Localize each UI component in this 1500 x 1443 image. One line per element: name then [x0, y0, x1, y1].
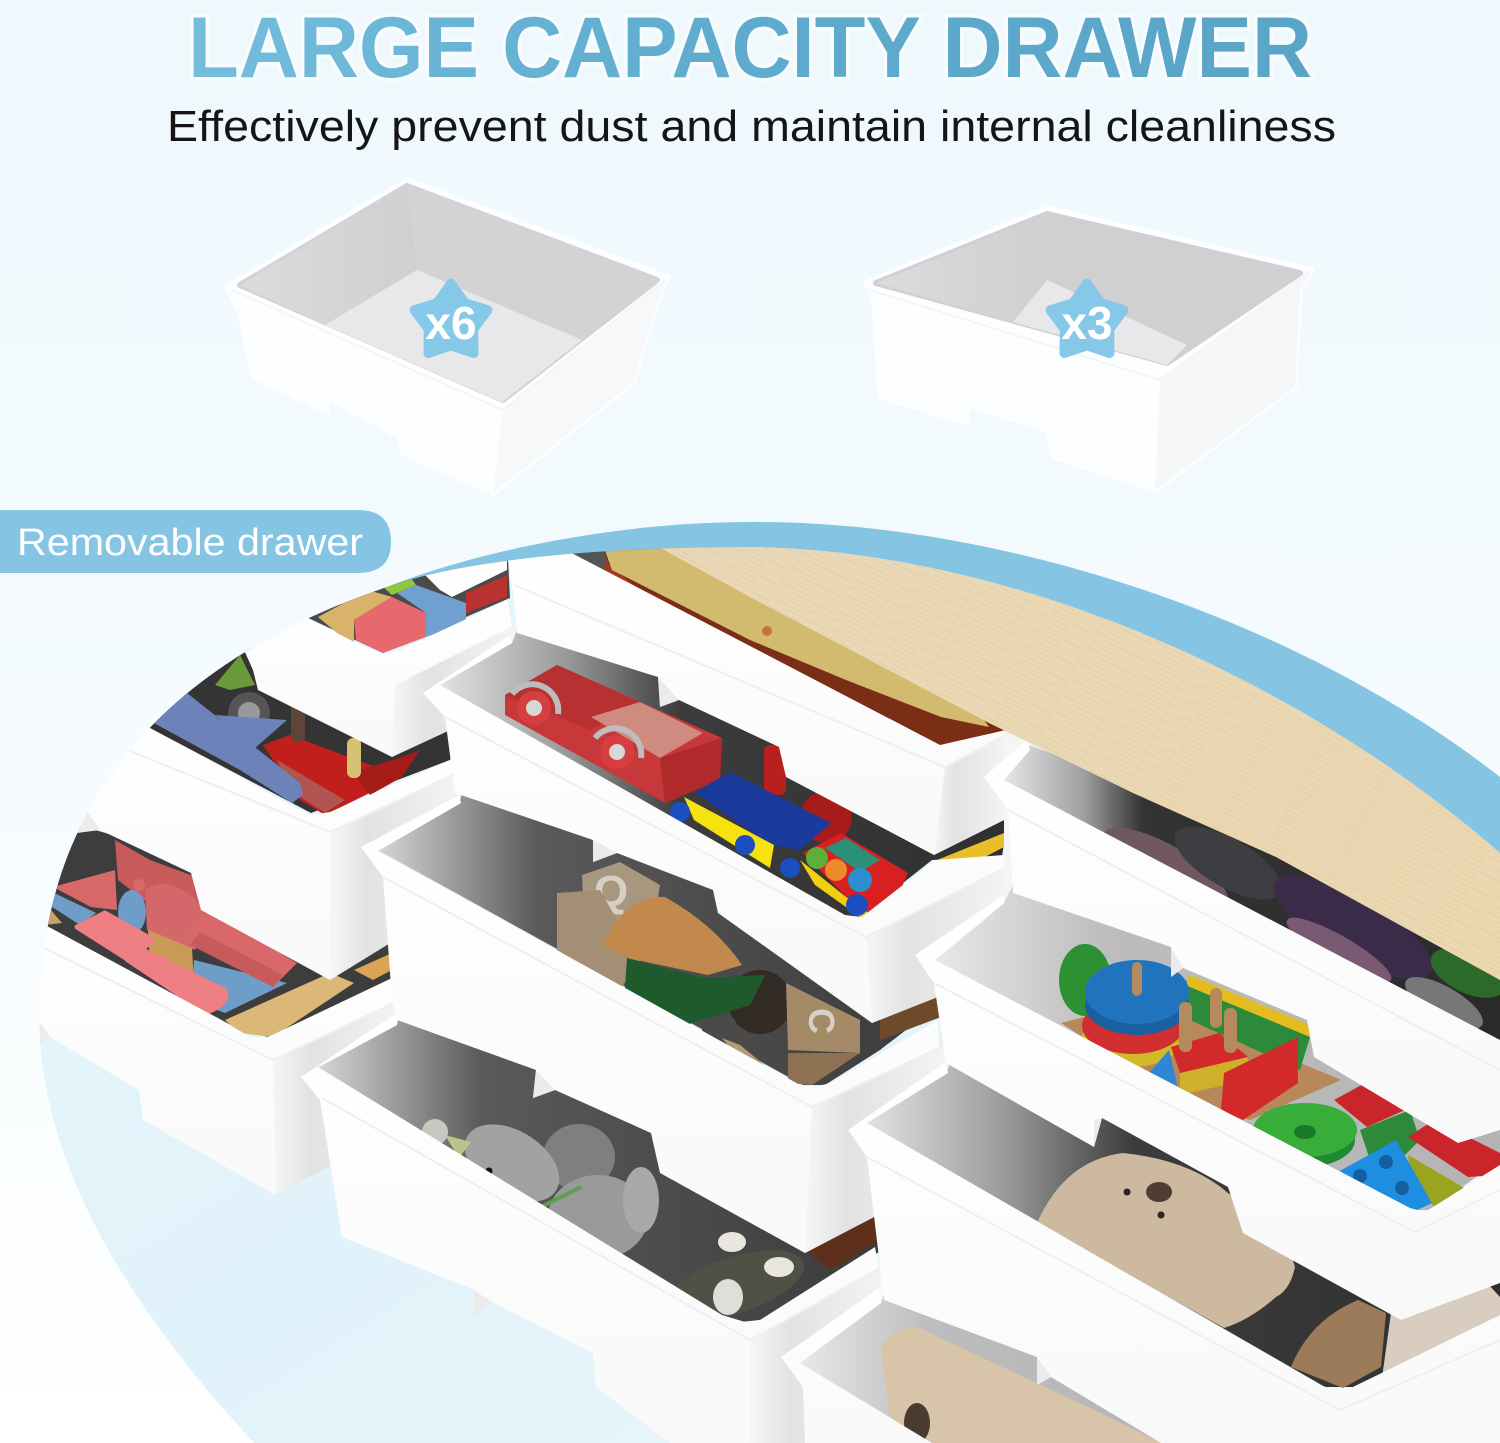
drawer: elephant plush [301, 990, 900, 1443]
badge: x3 [1050, 283, 1124, 353]
blue arc band [387, 522, 1500, 853]
badge: x6 [414, 283, 488, 353]
drawer: fire truck [423, 610, 1010, 1023]
subtitle: Effectively prevent dust and maintain internal cleanliness [167, 102, 1336, 151]
drawer: bear plush [848, 1040, 1500, 1443]
badge: x3: x3 [1061, 297, 1113, 349]
drawer: wood animal, bottom right [781, 1288, 1161, 1443]
pill label: removable drawer: Removable drawer [17, 522, 363, 564]
drawer product: six pack [227, 180, 668, 493]
drawer: wood letter blocks [361, 770, 945, 1253]
icon: toy cars [1104, 826, 1500, 1028]
wood tabletop [655, 545, 1500, 980]
pill label: removable drawer [0, 510, 391, 573]
drawer: shape stacker [915, 870, 1500, 1320]
drawer: toy cars [984, 740, 1500, 1143]
icon: rabbit toy [676, 1232, 804, 1316]
drawer: colored blocks, top left [244, 540, 515, 757]
icon: fire truck toy [505, 665, 722, 803]
icon: gear toy [780, 833, 908, 917]
side frame [1004, 725, 1032, 905]
icon: elephant toy [422, 1119, 659, 1254]
title: LARGE CAPACITY DRAWER [188, 0, 1312, 96]
badge: x6: x6 [425, 297, 477, 349]
icon: yellow blue bus toy [670, 772, 831, 868]
drawer: toy vehicle, middle left [60, 640, 470, 980]
drawer: wood letter blocks: Q [594, 867, 628, 916]
drawer: wooden blocks, lower left [20, 820, 400, 1195]
drawer: top tray with play board [507, 530, 1006, 855]
drawer: wood letter blocks: C [801, 1008, 842, 1034]
drawer unit close-up [20, 530, 1500, 1443]
drawer product: three pack [865, 208, 1312, 490]
icon: bear toy [1037, 1153, 1295, 1328]
pale backing disk [39, 522, 1500, 1443]
